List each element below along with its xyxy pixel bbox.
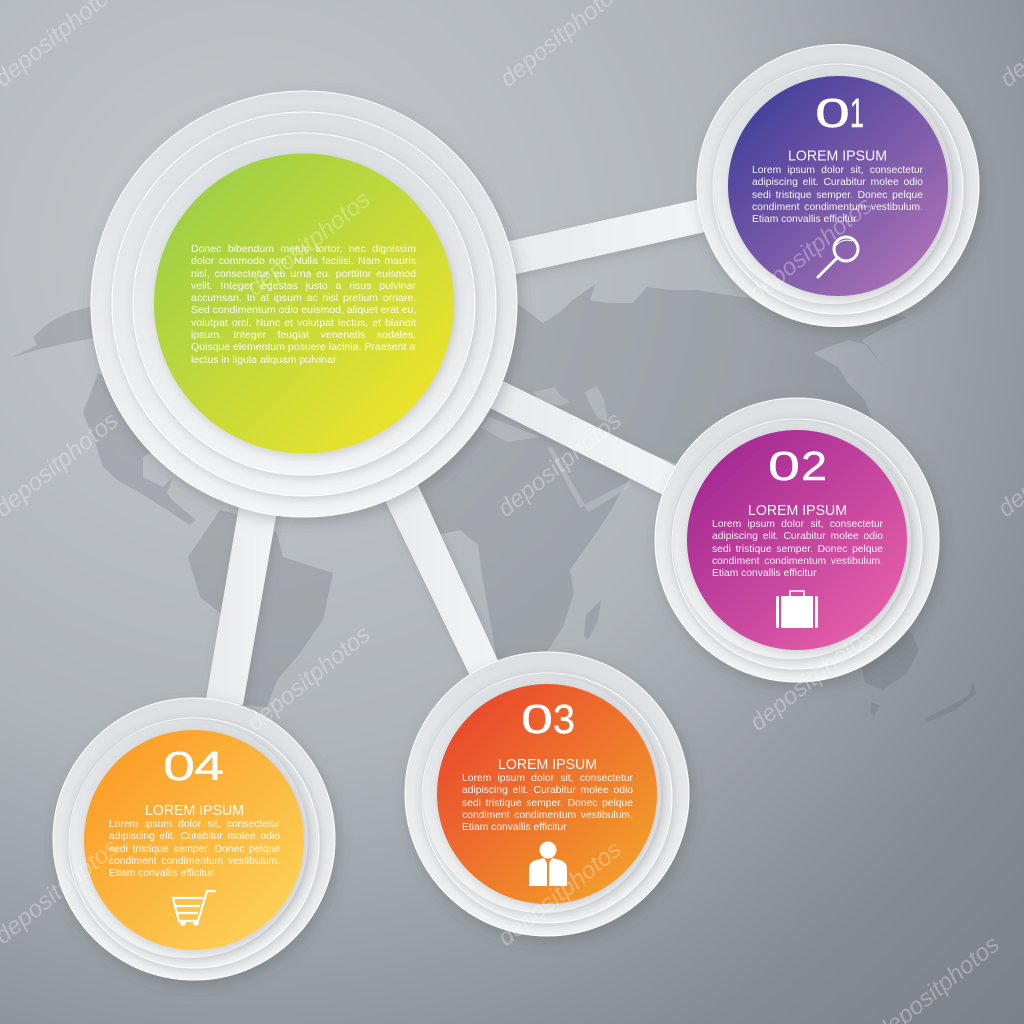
text 04: sedi tristique semper. Donec pelque xyxy=(109,844,280,855)
main paragraph: lectus in ligula aliquam pulvinar xyxy=(191,354,336,366)
heading 03: LOREM IPSUM xyxy=(498,757,597,773)
number 03: 3 xyxy=(553,696,575,742)
text 04: Etiam convallis efficitur xyxy=(109,868,214,879)
number 01 xyxy=(815,90,864,136)
connector: to 02 xyxy=(480,377,680,496)
icon: magnifier xyxy=(818,237,858,277)
number 03 xyxy=(521,696,575,742)
watermarks: depositphotos xyxy=(493,836,627,952)
text 01: Lorem ipsum dolor sit, consectetur xyxy=(752,165,923,176)
text 03 xyxy=(462,773,633,837)
main paragraph: Sed condimentum odio euismod, aliquet erat eu, xyxy=(191,304,416,316)
text 03: condiment condimentum vestibulum. xyxy=(462,810,633,821)
text 02: sedi tristique semper. Donec pelque xyxy=(712,544,883,555)
text 04: adipiscing elit. Curabitur molee odio xyxy=(109,831,280,842)
watermarks: depositphotos xyxy=(242,186,376,302)
text 04: Lorem ipsum dolor sit, consectetur xyxy=(109,819,280,830)
number 04: 4 xyxy=(194,743,224,789)
number 01: 0 xyxy=(815,90,850,136)
world map xyxy=(10,285,976,722)
map: alaska xyxy=(10,307,110,358)
map: australia xyxy=(850,630,919,690)
connector: to 01 xyxy=(505,199,705,275)
text 01: sedi tristique semper. Donec pelque xyxy=(752,190,923,201)
watermarks: depositphotos xyxy=(745,621,879,737)
map: africa and arabia xyxy=(415,390,640,670)
text 01 xyxy=(752,165,923,229)
connector: to 04 xyxy=(205,500,278,705)
map: eurasia xyxy=(490,285,907,500)
text 02: condiment condimentum vestibulum. xyxy=(712,556,883,567)
text 03: Lorem ipsum dolor sit, consectetur xyxy=(462,773,633,784)
number 01: 1 xyxy=(850,90,864,136)
text 02: Etiam convallis efficitur xyxy=(712,568,817,579)
text 02: adipiscing elit. Curabitur molee odio xyxy=(712,531,883,542)
main paragraph: Quisque elementum posuere lacinia. Praesent at xyxy=(191,341,416,353)
text 02: Lorem ipsum dolor sit, consectetur xyxy=(712,519,883,530)
text 01: condiment condimentum vestibulum. xyxy=(752,202,923,213)
panel: step 02 xyxy=(655,398,939,682)
main paragraph: Donec bibendum metus tortor, nec dignissim xyxy=(191,243,416,255)
number 03: 0 xyxy=(521,696,553,742)
main paragraph xyxy=(191,243,416,368)
text 04: condiment condimentum vestibulum. xyxy=(109,856,280,867)
panel: main green circle xyxy=(91,91,517,517)
watermarks: depositphotos xyxy=(493,407,627,523)
heading 04: LOREM IPSUM xyxy=(145,803,244,819)
watermarks: depositphotos xyxy=(242,621,376,737)
icon: businessman xyxy=(529,842,567,886)
watermarks: depositphotos xyxy=(744,192,878,308)
text 04 xyxy=(109,819,280,883)
text 03: adipiscing elit. Curabitur molee odio xyxy=(462,785,633,796)
number 02: 2 xyxy=(801,443,827,489)
text 02 xyxy=(712,519,883,583)
connector lines xyxy=(205,199,705,705)
map: south america xyxy=(188,510,333,707)
number 04: 0 xyxy=(163,743,195,789)
main paragraph: accumsan. In at ipsum ac nisl pretium ornare. xyxy=(191,292,416,304)
panel: step 01 xyxy=(697,44,979,326)
panel: step 04 xyxy=(53,698,335,980)
number 02: 0 xyxy=(768,443,800,489)
connector: to 03 xyxy=(380,485,500,680)
main paragraph: ipsum. Integer feugiat venenatis sodales. xyxy=(191,329,416,341)
map: north and central america xyxy=(83,373,196,525)
number 04 xyxy=(163,743,224,789)
map: new zealand xyxy=(924,682,976,722)
main paragraph: dolor commodo non. Nulla facilisi. Nam mauris xyxy=(191,255,416,267)
main paragraph: volutpat orci. Nunc et volutpat lectus, et blandit xyxy=(191,317,416,329)
panel: step 03 xyxy=(405,652,689,936)
text 03: Etiam convallis efficitur xyxy=(462,822,567,833)
heading 02: LOREM IPSUM xyxy=(748,503,847,519)
heading 01: LOREM IPSUM xyxy=(788,148,887,164)
text 03: sedi tristique semper. Donec pelque xyxy=(462,798,633,809)
number 02 xyxy=(768,443,827,489)
map: inland seas xyxy=(480,386,632,512)
map: tasmania xyxy=(870,702,880,716)
main paragraph: nisl, consectetur eu urna eu, porttitor euismod xyxy=(191,268,416,280)
text 01: adipiscing elit. Curabitur molee odio xyxy=(752,177,923,188)
icon: shopping cart xyxy=(173,891,216,925)
map: madagascar xyxy=(584,600,601,640)
icon: suitcase xyxy=(776,591,818,628)
main paragraph: velit. Integer egestas justo a risus pulvinar xyxy=(191,280,416,292)
text 01: Etiam convallis efficitur xyxy=(752,214,857,225)
